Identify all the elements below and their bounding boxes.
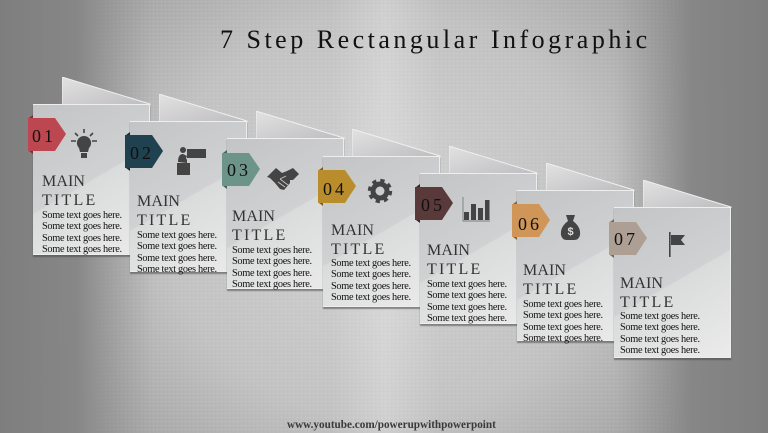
step 1 (28, 77, 150, 258)
step 6 (512, 163, 634, 344)
main title 4: TITLE (331, 241, 386, 258)
icon: gear (368, 178, 392, 204)
body text 5: Some text goes here. (427, 279, 507, 290)
body text 2: Some text goes here. (137, 241, 217, 252)
body text 1 (42, 210, 122, 255)
body text 4: Some text goes here. (331, 269, 411, 280)
number 1: 01 (32, 126, 56, 146)
body text 5: Some text goes here. (427, 290, 507, 301)
body text 7: Some text goes here. (620, 322, 700, 333)
body text 6: Some text goes here. (523, 333, 603, 344)
number 6: 06 (518, 214, 542, 234)
back flap 7 (643, 180, 732, 208)
back flap 3 (256, 111, 344, 139)
body text 7 (620, 311, 700, 357)
main title 7: TITLE (620, 294, 675, 311)
tab 5 (415, 184, 453, 223)
main title 6: MAIN (523, 262, 566, 279)
main title 3: TITLE (232, 227, 287, 244)
body text 1: Some text goes here. (42, 221, 122, 232)
body text 2: Some text goes here. (137, 264, 217, 275)
back flap 2 (159, 94, 248, 122)
body text 7: Some text goes here. (620, 311, 700, 322)
body text 3 (232, 245, 312, 290)
body text 3: Some text goes here. (232, 279, 312, 290)
body text 5 (427, 279, 507, 324)
number 7: 07 (614, 229, 638, 249)
body text 3: Some text goes here. (232, 256, 312, 267)
title: 7 Step Rectangular Infographic (220, 25, 651, 54)
main title 1: TITLE (42, 192, 97, 209)
step 5 (415, 146, 538, 326)
main title 6 (523, 262, 578, 298)
body text 6: Some text goes here. (523, 299, 603, 310)
back flap 1 (62, 77, 150, 105)
main title 7 (620, 274, 675, 312)
main title 3: MAIN (232, 208, 275, 225)
main title 3 (232, 208, 287, 244)
body text 6 (523, 299, 603, 344)
main title 5: TITLE (427, 261, 482, 278)
icon: money bag (560, 215, 580, 240)
body text 4: Some text goes here. (331, 292, 411, 303)
main title 2: TITLE (137, 212, 192, 229)
main title 2 (137, 193, 192, 229)
tab 6 (512, 201, 550, 240)
body text 6: Some text goes here. (523, 322, 603, 333)
body text 3: Some text goes here. (232, 245, 312, 256)
card 5 (420, 173, 537, 324)
body text 1: Some text goes here. (42, 233, 122, 244)
back flap 4 (352, 129, 440, 157)
body text 7: Some text goes here. (620, 345, 700, 356)
body text 6: Some text goes here. (523, 310, 603, 321)
body text 4: Some text goes here. (331, 281, 411, 292)
main title 4: MAIN (331, 222, 374, 239)
body text 2: Some text goes here. (137, 230, 217, 241)
main title 5 (427, 242, 482, 278)
step 2 (125, 94, 248, 275)
body text 3: Some text goes here. (232, 268, 312, 279)
card 2 (130, 121, 247, 272)
icon: bar chart (462, 197, 490, 222)
icon: handshake (267, 168, 299, 190)
tab 2 (125, 132, 163, 171)
icon: presenter (177, 147, 206, 175)
footer url: www.youtube.com/powerupwithpowerpoint (287, 419, 496, 431)
body text 2 (137, 230, 217, 275)
main title 6: TITLE (523, 281, 578, 298)
tab 3 (222, 150, 260, 189)
number 2: 02 (130, 143, 154, 163)
main title 1: MAIN (42, 173, 85, 190)
number 4: 04 (323, 179, 347, 199)
step 3 (222, 111, 344, 292)
body text 1: Some text goes here. (42, 244, 122, 255)
card 3 (227, 138, 344, 289)
body text 1: Some text goes here. (42, 210, 122, 221)
icon: flag (669, 232, 685, 257)
icon: light bulb (71, 129, 97, 158)
back flap 6 (546, 163, 634, 191)
card 1 (33, 104, 150, 255)
main title 4 (331, 222, 386, 258)
back flap 5 (449, 146, 538, 174)
card 7 (614, 207, 731, 358)
main title 2: MAIN (137, 193, 180, 210)
tab 7 (609, 219, 647, 258)
card 6 (517, 190, 634, 341)
body text 5: Some text goes here. (427, 313, 507, 324)
tab 1 (28, 115, 66, 154)
main title 5: MAIN (427, 242, 470, 259)
tab 4 (318, 167, 356, 206)
number 5: 05 (421, 195, 445, 215)
body text 7: Some text goes here. (620, 334, 700, 345)
body text 5: Some text goes here. (427, 302, 507, 313)
main title 7: MAIN (620, 275, 663, 292)
card 4 (323, 156, 440, 307)
main title 1 (42, 173, 97, 209)
number 3: 03 (227, 160, 251, 180)
step 7 (609, 180, 732, 360)
icon: money bag: $ (567, 226, 574, 238)
body text 2: Some text goes here. (137, 253, 217, 264)
body text 4: Some text goes here. (331, 258, 411, 269)
body text 4 (331, 258, 411, 303)
step 4 (318, 129, 440, 310)
